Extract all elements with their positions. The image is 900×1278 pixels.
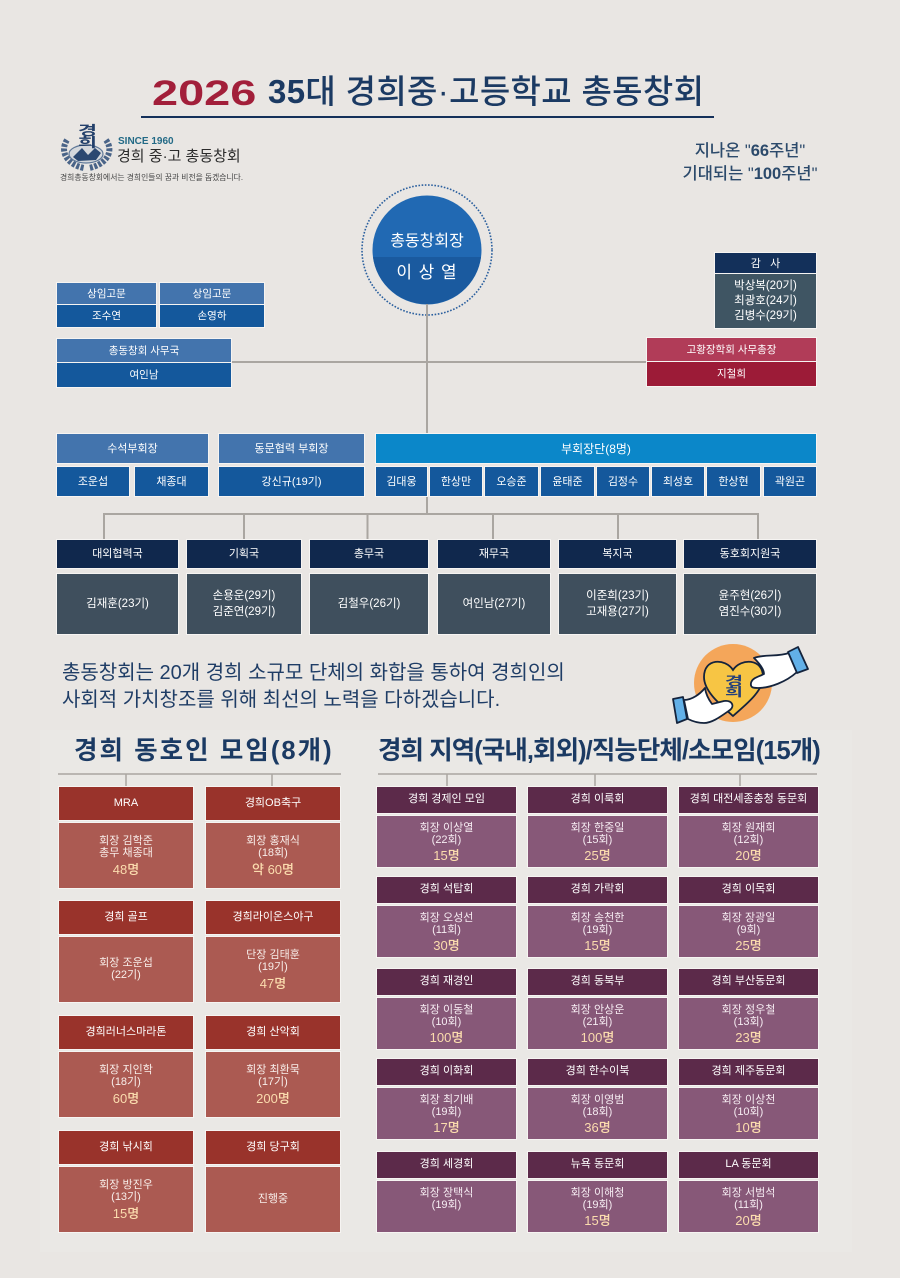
name (57, 363, 231, 387)
role: 총동창회 사무국 (109, 345, 179, 357)
group card: garak: 회장 송천한 (571, 912, 624, 924)
club card: marathon: 60명 (113, 1091, 139, 1106)
group card: busan: 회장 정우철 (722, 1004, 775, 1016)
secretariat box (56, 338, 232, 388)
group card: seoktap: (11회) (432, 924, 461, 936)
club card: golf: 회장 조운섭 (99, 957, 153, 969)
scholarship box (646, 337, 817, 387)
icon: school emblem (61, 123, 112, 171)
department: welfare (558, 539, 677, 635)
anniversary text: 지나온 "66주년" (695, 142, 805, 160)
group card: imok: 25명 (735, 938, 762, 953)
group card: los angeles: (11회) (734, 1199, 763, 1211)
name: 손영하 (198, 310, 226, 322)
department: club support: 염진수(30기) (719, 606, 781, 618)
club card: OB soccer: (18회) (258, 847, 288, 859)
group card: jaegyeongin: (10회) (432, 1016, 461, 1028)
department: finance: 재무국 (479, 548, 509, 560)
names row: 김정수 (608, 476, 638, 488)
group card: jaegyeongin: 회장 이동철 (420, 1004, 473, 1016)
role (647, 338, 816, 362)
title text: 35대 경희중·고등학교 총동창회 (268, 73, 704, 110)
group card: economists: 15명 (433, 848, 460, 863)
icon: hands holding heart: 희 (725, 685, 743, 699)
group card: jaegyeongin: 100명 (430, 1030, 463, 1045)
club card: billiards: 경희 당구회 (246, 1141, 300, 1153)
group card: segyeong: 회장 장택식 (420, 1187, 473, 1199)
club card: MRA: 회장 김학준 (99, 835, 153, 847)
vice president group (375, 433, 817, 497)
name: 여인남 (130, 369, 158, 381)
group card: daejeon: 20명 (735, 848, 762, 863)
club card: MRA: 48명 (113, 862, 139, 877)
club card: billiards (205, 1130, 341, 1233)
club card: MRA: 총무 채종대 (99, 847, 153, 859)
icon: school emblem: 경 (78, 123, 97, 138)
names row: 한상만 (441, 476, 471, 488)
group card: garak (527, 876, 668, 958)
group card: garak: 15명 (584, 938, 611, 953)
group card: busan (678, 968, 819, 1050)
lower section background panel (40, 730, 852, 1252)
role: 상임고문 (87, 288, 126, 300)
names (715, 274, 816, 328)
club card: hiking: 200명 (256, 1091, 290, 1106)
group card: busan: 경희 부산동문회 (712, 975, 785, 987)
mission statement (62, 662, 565, 711)
group card: daejeon: (12회) (734, 834, 763, 846)
name 1: 조운섭 (78, 476, 108, 488)
group card: jeju: (10회) (734, 1106, 763, 1118)
club card: fishing (58, 1130, 194, 1233)
group card: jeju: 경희 제주동문회 (712, 1065, 785, 1077)
department: finance: 여인남(27기) (463, 598, 525, 610)
name: 지철희 (717, 368, 746, 380)
group card: ihwa: (19회) (432, 1106, 461, 1118)
club card: lions baseball: (19기) (258, 961, 288, 973)
group card: segyeong: (19회) (432, 1199, 461, 1211)
group card: seoktap (376, 876, 517, 958)
group card: busan: 23명 (735, 1030, 762, 1045)
group card: los angeles: 20명 (735, 1213, 762, 1228)
group card: jeju: 10명 (735, 1120, 762, 1135)
group card: seoktap: 경희 석탑회 (420, 883, 473, 895)
club card: OB soccer: 약 60명 (252, 862, 294, 877)
name 2: 채종대 (156, 476, 187, 488)
group card: imok: (9회) (737, 924, 760, 936)
group card: busan: (13회) (734, 1016, 763, 1028)
names row: 김대웅 (386, 476, 417, 488)
club card: hiking (205, 1015, 341, 1118)
name (160, 305, 264, 327)
since text: SINCE 1960 (118, 136, 174, 147)
club card: marathon: 경희러너스마라톤 (86, 1026, 166, 1038)
group card: daejeon: 회장 원재희 (722, 822, 775, 834)
department: general affairs: 총무국 (354, 548, 384, 560)
department: external cooperation: 김재훈(23기) (86, 598, 149, 610)
icon: hands holding heart: 경 (725, 674, 743, 688)
department: planning: 김준연(29기) (213, 606, 275, 618)
club card: hiking: 경희 산악회 (246, 1026, 300, 1038)
anniversary text: 기대되는 "100주년" (683, 165, 817, 183)
club card: fishing: 회장 방진우 (99, 1179, 153, 1191)
group card: imok: 회장 장광일 (722, 912, 775, 924)
name (57, 305, 156, 327)
senior vice presidents (56, 433, 209, 497)
group card: economists (376, 786, 517, 868)
heading: clubs: 경희 동호인 모임(8개) (74, 737, 334, 765)
icon: school emblem: 희 (78, 135, 97, 150)
group card: new york: (19회) (583, 1199, 612, 1211)
names row: 윤태준 (552, 476, 583, 488)
role: 감 사 (751, 258, 780, 270)
group card: jaegyeongin (376, 968, 517, 1050)
group card: northeast: 경희 동북부 (571, 975, 624, 987)
club card: lions baseball: 단장 김태훈 (246, 949, 300, 961)
club card: fishing: 15명 (113, 1206, 139, 1221)
group card: daejeon: 경희 대전세종충청 동문회 (690, 793, 807, 805)
name: 강신규(19기) (261, 476, 322, 488)
group card: seoktap: 회장 오성선 (420, 912, 473, 924)
group card: economists: 회장 이상열 (420, 822, 473, 834)
president circle (361, 184, 493, 316)
club card: lions baseball (205, 900, 341, 1003)
president role: 총동창회장 (390, 233, 464, 250)
club card: marathon: 회장 지인학 (99, 1064, 153, 1076)
club card: MRA: MRA (114, 797, 138, 809)
club card: OB soccer: 회장 홍재식 (246, 835, 300, 847)
group card: jeju: 회장 이상천 (722, 1094, 775, 1106)
department: external cooperation (56, 539, 179, 635)
names row: 한상현 (718, 476, 749, 488)
group card: daejeon (678, 786, 819, 868)
icon: hands holding heart (672, 644, 809, 724)
names row (375, 466, 817, 497)
group card: new york: 15명 (584, 1213, 611, 1228)
group card: jeju (679, 1059, 818, 1139)
title year 2026: 2026 (152, 74, 256, 113)
names row: 최성호 (663, 476, 693, 488)
group card: irook: 경희 이룩회 (571, 793, 624, 805)
group card: imok (678, 876, 819, 958)
logo tagline: 경희총동창회에서는 경희인들의 꿈과 비전을 돕겠습니다. (60, 173, 243, 182)
anniversary text (683, 142, 817, 183)
group card: seoktap: 30명 (433, 938, 460, 953)
group card: garak: (19회) (583, 924, 612, 936)
club card: lions baseball: 47명 (260, 976, 286, 991)
group card: hansu north: (18회) (583, 1106, 612, 1118)
club card: lions baseball: 경희라이온스야구 (233, 911, 313, 923)
department: welfare: 이준희(23기) (586, 590, 649, 602)
group card: segyeong (377, 1152, 516, 1232)
group card: los angeles: 회장 서범석 (722, 1187, 775, 1199)
club card: hiking: 회장 최환묵 (246, 1064, 300, 1076)
club card: marathon (58, 1015, 194, 1118)
mission statement: 총동창회는 20개 경희 소규모 단체의 화합을 통하여 경희인의 (62, 662, 565, 684)
department: club support: 윤주현(26기) (719, 590, 781, 602)
group card: irook: 회장 한중일 (571, 822, 624, 834)
club card: billiards: 진행중 (258, 1193, 288, 1205)
role (160, 283, 264, 305)
club card: fishing: (13기) (111, 1191, 141, 1203)
advisor box 1 (56, 282, 157, 328)
role (57, 434, 208, 463)
group card: los angeles: LA 동문회 (725, 1158, 772, 1170)
name 2 (135, 467, 208, 496)
group card: irook: 25명 (584, 848, 611, 863)
group card: economists: (22회) (432, 834, 461, 846)
club card: golf: 경희 골프 (104, 911, 148, 923)
dotted ring and disc (361, 184, 493, 316)
group card: northeast: 회장 안상운 (571, 1004, 624, 1016)
club card: golf (58, 900, 194, 1003)
logo name: 경희 중·고 총동창회 (117, 148, 241, 165)
club card: MRA (58, 786, 194, 889)
department: club support: 동호회지원국 (720, 548, 780, 560)
group card: economists: 경희 경제인 모임 (408, 793, 485, 805)
alumni cooperation vice president (218, 433, 365, 497)
group card: imok: 경희 이목회 (722, 883, 775, 895)
group card: hansu north (528, 1059, 667, 1139)
group card: irook (527, 786, 668, 868)
department: club support (683, 539, 817, 635)
department: planning (186, 539, 302, 635)
club card: golf: (22기) (111, 969, 141, 981)
group heading (376, 434, 816, 463)
group card: northeast: (21회) (583, 1016, 612, 1028)
club card: marathon: (18기) (111, 1076, 141, 1088)
group card: ihwa: 17명 (433, 1120, 460, 1135)
department: finance (437, 539, 551, 635)
department: general affairs: 김철우(26기) (338, 598, 400, 610)
title (141, 70, 714, 118)
role: 고황장학회 사무총장 (687, 344, 776, 356)
advisor box 2 (159, 282, 265, 328)
group card: hansu north: 경희 한수이북 (566, 1065, 629, 1077)
names: 김병수(29기) (734, 310, 797, 322)
group card: segyeong: 경희 세경회 (420, 1158, 473, 1170)
department: planning: 손용운(29기) (213, 590, 275, 602)
department: external cooperation: 대외협력국 (92, 548, 143, 560)
auditor box (714, 252, 817, 329)
group card: new york: 뉴욕 동문회 (571, 1158, 624, 1170)
name: 조수연 (92, 310, 121, 322)
names row: 곽원곤 (775, 476, 805, 488)
names row: 오승준 (496, 476, 527, 488)
group heading: 부회장단(8명) (561, 442, 631, 456)
group card: los angeles (679, 1152, 818, 1232)
mission statement: 사회적 가치창조를 위해 최선의 노력을 다하겠습니다. (62, 689, 500, 711)
group card: irook: (15회) (583, 834, 612, 846)
role (715, 253, 816, 274)
role: 동문협력 부회장 (255, 442, 328, 454)
group card: new york (528, 1152, 667, 1232)
club card: fishing: 경희 낚시회 (99, 1141, 153, 1153)
department: welfare: 고재용(27기) (586, 606, 649, 618)
group card: hansu north: 36명 (584, 1120, 611, 1135)
club card: hiking: (17기) (258, 1076, 288, 1088)
name (647, 362, 816, 386)
group card: jaegyeongin: 경희 재경인 (420, 975, 473, 987)
logo block (60, 123, 243, 182)
club card: OB soccer: 경희OB축구 (245, 797, 301, 809)
group card: ihwa: 회장 최기배 (420, 1094, 473, 1106)
department: planning: 기획국 (229, 548, 259, 560)
group card: ihwa (377, 1059, 516, 1139)
group card: northeast (527, 968, 668, 1050)
president name: 이 상 열 (396, 263, 458, 282)
department: welfare: 복지국 (602, 548, 633, 560)
group card: garak: 경희 가락회 (571, 883, 624, 895)
role (57, 283, 156, 305)
role (219, 434, 364, 463)
names: 최광호(24기) (734, 294, 797, 306)
heading: regional groups: 경희 지역(국내,회외)/직능단체/소모임(15개) (378, 737, 820, 765)
names: 박상복(20기) (734, 280, 797, 292)
group card: ihwa: 경희 이화회 (420, 1065, 473, 1077)
name (219, 467, 364, 496)
role: 상임고문 (193, 288, 231, 300)
group card: new york: 회장 이해청 (571, 1187, 624, 1199)
group card: northeast: 100명 (581, 1030, 614, 1045)
department: general affairs (309, 539, 429, 635)
name 1 (57, 467, 129, 496)
role (57, 339, 231, 363)
club card: OB soccer (205, 786, 341, 889)
group card: hansu north: 회장 이영범 (571, 1094, 624, 1106)
role: 수석부회장 (107, 442, 158, 454)
